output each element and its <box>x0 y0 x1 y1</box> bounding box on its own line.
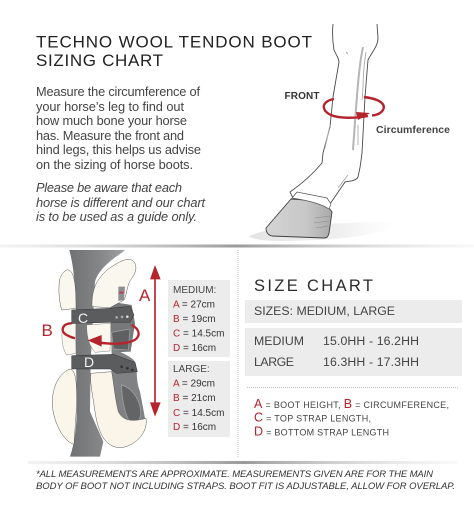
guidance note: horse is different and our chart <box>36 195 205 210</box>
label B: B <box>42 321 53 340</box>
hoof growth lines <box>314 216 330 228</box>
logo tab <box>118 287 125 301</box>
panel: large measurements: A = 29cm <box>173 378 215 390</box>
title <box>36 32 312 70</box>
legend: A = BOOT HEIGHT, B = CIRCUMFERENCE, <box>254 397 449 411</box>
boot shell <box>110 302 135 352</box>
panel: medium measurements: D = 16cm <box>173 343 216 354</box>
height arrow A shaft <box>152 273 157 408</box>
panel: sizes: SIZES: MEDIUM, LARGE <box>254 304 395 318</box>
panel: medium measurements: MEDIUM: <box>173 285 216 296</box>
panel: sizes <box>245 300 462 323</box>
ring arrowhead <box>88 335 102 347</box>
height arrow A heads <box>150 265 161 417</box>
grey leg <box>69 250 125 457</box>
panel: medium measurements <box>168 280 230 357</box>
intro text: your horse’s leg to find out <box>36 99 184 114</box>
panel: height ranges: MEDIUM <box>254 334 304 348</box>
ring arrow B <box>63 323 139 344</box>
leg detail lines <box>325 52 366 188</box>
panel: height ranges: LARGE <box>254 355 294 369</box>
intro text: has. Measure the front and <box>36 128 184 143</box>
vertical divider <box>237 250 239 458</box>
hoof <box>266 199 332 238</box>
panel: height ranges: 15.0HH - 16.2HH <box>323 334 419 348</box>
panel: height ranges <box>245 328 462 376</box>
footnote: *ALL MEASUREMENTS ARE APPROXIMATE. MEASUREMENTS GIVEN ARE FOR THE MAIN <box>36 469 433 480</box>
fleece mid <box>62 323 111 355</box>
boot illustration <box>52 250 161 457</box>
intro text: hind legs, this helps us advise <box>36 142 201 157</box>
lower shell <box>112 347 145 432</box>
panel: large measurements: LARGE: <box>173 364 210 375</box>
intro text: how much bone your horse <box>36 113 187 128</box>
legend: D = BOTTOM STRAP LENGTH <box>254 424 389 438</box>
leg shading lines <box>353 47 363 150</box>
panel: large measurements: C = 14.5cm <box>173 408 224 419</box>
horse leg illustration <box>249 24 400 241</box>
arrowhead <box>356 112 370 120</box>
intro text <box>36 84 201 172</box>
title: SIZING CHART <box>36 51 163 70</box>
fleece lower right <box>91 372 146 448</box>
top divider <box>0 244 474 248</box>
lower panel <box>122 385 141 423</box>
panel: large measurements: D = 16cm <box>173 422 216 433</box>
panel: medium measurements: A = 27cm <box>173 300 215 310</box>
leg outline <box>290 24 378 204</box>
guidance note <box>36 180 205 224</box>
panel: large measurements <box>168 361 230 437</box>
fleece upper right <box>92 259 136 308</box>
footnote <box>36 469 455 492</box>
coronet band <box>292 192 331 209</box>
horizontal divider <box>247 386 459 388</box>
strap letter D: D <box>84 354 94 370</box>
title: TECHNO WOOL TENDON BOOT <box>36 32 312 52</box>
intro text: on the sizing of horse boots. <box>36 157 193 172</box>
circumference arrow <box>324 97 384 118</box>
panel: medium measurements: C = 14.5cm <box>173 328 224 340</box>
bottom divider <box>28 461 458 464</box>
footnote: BODY OF BOOT NOT INCLUDING STRAPS. BOOT FIT IS ADJUSTABLE, ALLOW FOR OVERLAP. <box>36 481 455 492</box>
label A: A <box>139 286 151 305</box>
legend <box>254 397 449 438</box>
panel: medium measurements: B = 19cm <box>173 314 216 325</box>
strap D <box>72 354 137 373</box>
panel: height ranges: 16.3HH - 17.3HH <box>323 355 419 369</box>
fleece lower left <box>52 369 77 444</box>
hoof shadow <box>249 222 400 241</box>
label: circumference: Circumference <box>376 124 450 136</box>
legend: C = TOP STRAP LENGTH, <box>254 410 371 424</box>
label: front: FRONT <box>284 91 320 102</box>
intro text: Measure the circumference of <box>36 84 200 99</box>
heading: size chart: SIZE CHART <box>254 277 373 295</box>
upper panel <box>112 329 130 350</box>
logo mark <box>119 292 123 294</box>
strap C <box>72 306 134 326</box>
panel: large measurements: B = 21cm <box>173 393 216 404</box>
fleece upper left <box>59 270 76 310</box>
guidance note: is to be used as a guide only. <box>36 209 197 224</box>
guidance note: Please be aware that each <box>36 180 182 195</box>
strap letter C: C <box>78 310 88 326</box>
